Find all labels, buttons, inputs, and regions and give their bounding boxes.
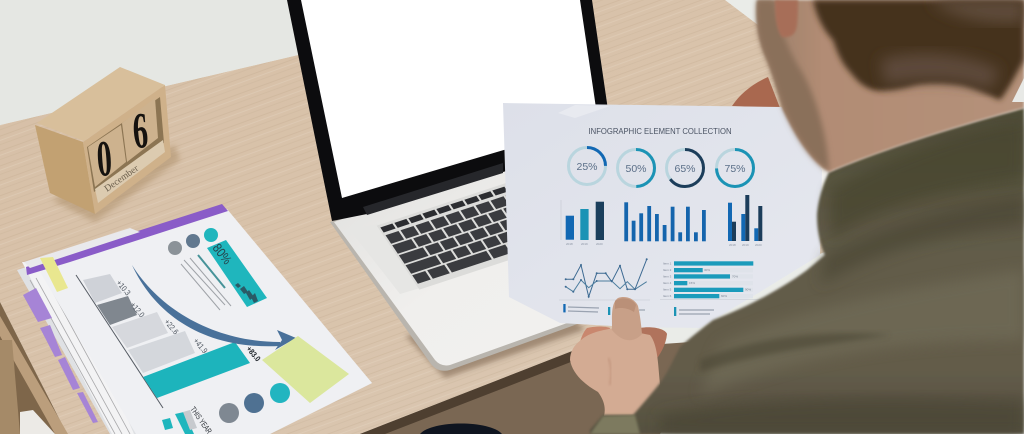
ring 75 percent	[716, 150, 754, 186]
digit 6: 6	[131, 103, 150, 160]
under-desk area	[360, 340, 720, 434]
document stack	[17, 204, 372, 434]
green sticky note	[262, 336, 349, 403]
wooden calendar	[35, 67, 180, 222]
laptop base	[330, 140, 640, 371]
calendar tile six	[122, 98, 158, 162]
ring 50 percent: 50%	[625, 163, 647, 175]
top sheet	[40, 209, 372, 434]
calendar top face	[37, 67, 165, 141]
horizontal bar chart	[660, 261, 761, 300]
neck and jaw	[757, 0, 1024, 172]
horizontal bar chart: 15%	[689, 281, 695, 285]
ring 75 percent: 75%	[724, 163, 746, 175]
bar chart three bars: 2020	[596, 242, 603, 246]
infographic sheet	[503, 103, 822, 328]
horizontal bar chart: Item 1	[663, 262, 672, 266]
sheet title: INFOGRAPHIC ELEMENT COLLECTION	[588, 126, 732, 136]
grouped bar chart: 2020	[755, 243, 762, 247]
laptop	[287, 0, 640, 378]
ring 65 percent	[666, 150, 704, 186]
teal stat panel: 80%	[210, 241, 235, 267]
bar chart eleven bars	[624, 202, 706, 241]
month label: December	[103, 163, 141, 194]
ear	[775, 0, 798, 37]
screen bezel	[287, 0, 610, 221]
line chart	[559, 258, 650, 300]
bar chart axis	[76, 275, 163, 408]
beard shadow	[757, 0, 829, 172]
gap behind sheet and collar	[815, 168, 835, 192]
teal stat panel	[207, 240, 267, 307]
upper finger	[578, 326, 610, 350]
bar chart three bars: 2019	[581, 242, 588, 246]
cuff	[590, 415, 640, 434]
hinge strip	[363, 163, 503, 215]
bar value labels: +10.3	[114, 279, 133, 298]
sleeve fold dark	[700, 333, 890, 372]
man's shirt	[590, 108, 1024, 434]
man's head and neck	[757, 0, 1024, 172]
bar chart three bars	[561, 200, 604, 246]
horizontal bar chart: Item 2	[663, 268, 672, 272]
yellow sticky tab	[40, 257, 68, 292]
thumb nail	[615, 298, 636, 312]
upper circles	[168, 228, 218, 255]
bar value labels: +22.6	[162, 318, 181, 337]
back fingers	[640, 327, 667, 362]
bar value labels: +41.9	[191, 337, 210, 356]
ring 50 percent	[618, 150, 654, 186]
shoulder fold dark	[820, 195, 1024, 285]
horizontal bar chart: 60%	[721, 294, 727, 298]
purple divider tabs	[23, 288, 98, 423]
hair	[813, 0, 1024, 100]
sheet paper	[503, 103, 822, 328]
shoulder highlight	[700, 270, 1024, 395]
white screen	[301, 0, 596, 198]
this year label	[162, 405, 214, 434]
keyboard	[377, 179, 559, 290]
palm and wrist	[570, 328, 660, 416]
curved arrow	[132, 265, 296, 350]
horizontal bar chart: 70%	[732, 274, 738, 278]
grouped bar chart: 2019	[742, 243, 749, 247]
horizontal bar chart: Item 6	[663, 294, 672, 298]
bar value labels	[114, 279, 263, 364]
collar shading	[830, 120, 1024, 240]
horizontal bar chart: 90%	[745, 288, 751, 292]
back hand holding sheet	[732, 77, 780, 108]
horizontal bar chart: 30%	[704, 268, 710, 272]
grouped bar chart: 2018	[729, 243, 736, 247]
laptop shadow on desk	[405, 320, 585, 378]
calendar recess	[87, 97, 164, 192]
chart bars	[83, 274, 250, 398]
ring 65 percent: 65%	[674, 163, 696, 175]
sleeve lower dark	[660, 397, 1024, 434]
hair lighter tufts	[880, 53, 1000, 90]
horizontal bar chart: Item 3	[663, 274, 672, 278]
horizontal bar chart: Item 4	[663, 281, 672, 285]
lower sheets	[17, 205, 372, 434]
grouped bar chart	[728, 195, 762, 247]
calendar front frame	[83, 85, 171, 214]
calendar month strip	[95, 140, 165, 203]
wall top-left	[0, 0, 300, 125]
ring 25 percent: 25%	[576, 161, 598, 173]
purple band	[26, 204, 228, 275]
bar chart three bars: 2018	[566, 242, 573, 246]
bar value labels: +12.0	[128, 301, 147, 320]
text block	[181, 255, 231, 310]
horizontal bar chart: Item 5	[663, 288, 672, 292]
palm rest highlight	[350, 224, 420, 294]
bar value labels: +83.0	[244, 345, 263, 364]
legend entries	[563, 304, 714, 316]
hair top highlight	[930, 0, 1024, 23]
ring 25 percent	[568, 148, 606, 184]
thumb	[612, 297, 642, 340]
calendar tile zero	[88, 125, 126, 187]
desk side and floor	[0, 302, 68, 434]
digit 0: 0	[95, 131, 114, 188]
lower circles	[219, 383, 290, 423]
man's front hand holding sheet	[570, 297, 667, 416]
wall sliver at right	[1012, 78, 1024, 102]
calendar left face	[35, 125, 95, 214]
